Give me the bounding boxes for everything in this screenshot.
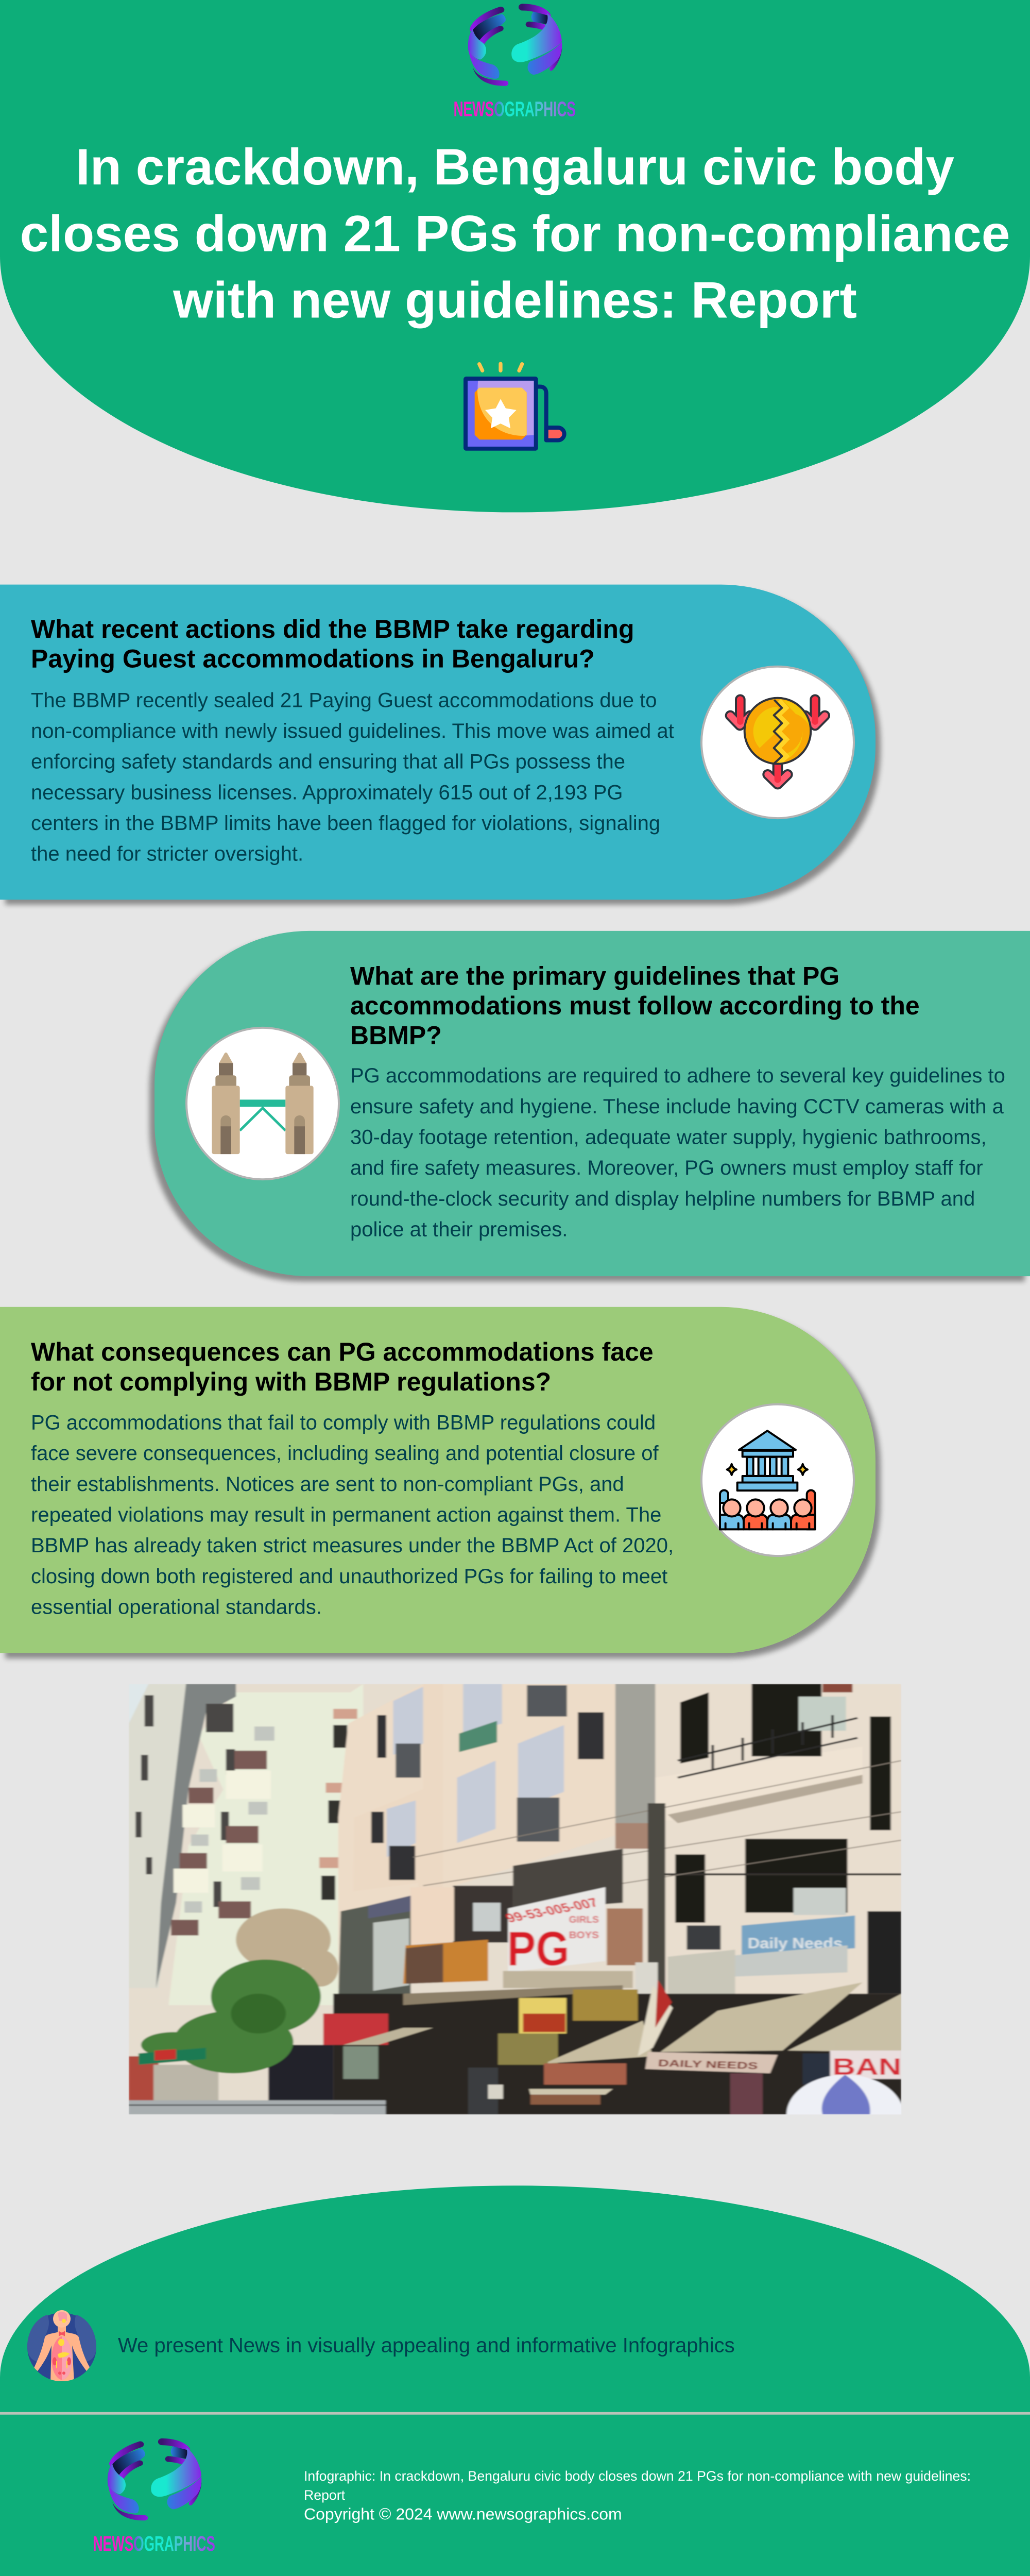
title [20, 138, 1010, 329]
text: consequences: essential operational standards. [31, 1596, 322, 1618]
heading: primary guidelines: What are the primary guidelines that PG [350, 962, 839, 990]
icon: courthouse with people [700, 1403, 855, 1557]
text: primary guidelines: round-the-clock security and display helpline numbers for BBMP and [350, 1188, 975, 1210]
text: recent actions: non-compliance with newly issued guidelines. This move was aimed at [31, 720, 674, 742]
heading: recent actions: What recent actions did the BBMP take regarding [31, 615, 634, 643]
text: primary guidelines: and fire safety measures. Moreover, PG owners must employ staff for [350, 1157, 983, 1179]
text: primary guidelines: PG accommodations are required to adhere to several key guidelines to [350, 1064, 1005, 1087]
heading: recent actions: Paying Guest accommodations in Bengaluru? [31, 645, 595, 673]
photo: street with PG sign: PG [507, 1922, 570, 1976]
logo: Newsographics footer [93, 2438, 215, 2555]
title: with new guidelines: Report [173, 272, 857, 329]
text: consequences [31, 1412, 674, 1618]
text: recent actions [31, 689, 674, 866]
panel: recent actions [0, 585, 876, 900]
text: primary guidelines: ensure safety and hygiene. These include having CCTV cameras with a [350, 1095, 1004, 1118]
panel: primary guidelines [154, 931, 1030, 1276]
text: primary guidelines: police at their premises. [350, 1218, 568, 1241]
heading: consequences: for not complying with BBMP regulations? [31, 1367, 551, 1396]
footer divider [0, 2412, 1030, 2415]
photo: street with PG sign: 99-53-005-007 [503, 1895, 601, 1925]
title: closes down 21 PGs for non-compliance [20, 205, 1010, 262]
heading: primary guidelines [350, 962, 920, 1050]
photo: street with PG sign: GIRLS [569, 1914, 599, 1925]
logo: Newsographics: NEWSOGRAPHICS [454, 97, 576, 121]
photo: street with PG sign: BOYS [569, 1929, 599, 1940]
panel: consequences [0, 1307, 876, 1653]
text: consequences: PG accommodations that fail to comply with BBMP regulations could [31, 1412, 656, 1434]
text: recent actions: the need for stricter oversight. [31, 843, 303, 866]
heading: consequences [31, 1337, 654, 1396]
footer credit text: Infographic: In crackdown, Bengaluru civic body closes down 21 PGs for non-compliance with new guidelines: [304, 2468, 971, 2484]
text: recent actions: centers in the BBMP limits have been flagged for violations, signaling [31, 812, 660, 835]
title: In crackdown, Bengaluru civic body [76, 138, 954, 196]
logo: Newsographics [454, 4, 576, 121]
icon: mug with star [464, 362, 566, 451]
photo: street with PG sign [129, 1684, 901, 2114]
logo: Newsographics footer: NEWSOGRAPHICS [93, 2532, 215, 2555]
icon: cracked coin with down arrows [700, 666, 855, 819]
text: consequences: repeated violations may result in permanent action against them. The [31, 1504, 661, 1526]
heading: recent actions [31, 615, 634, 673]
header panel [0, 0, 1030, 512]
icon: human anatomy [27, 2310, 96, 2381]
footer credit text: Report [304, 2487, 345, 2503]
text: consequences: closing down both registered and unauthorized PGs for failing to meet [31, 1565, 667, 1588]
text: primary guidelines [350, 1064, 1005, 1241]
photo: street with PG sign: Daily Needs [748, 1935, 843, 1952]
heading: primary guidelines: accommodations must follow according to the [350, 991, 920, 1020]
text: consequences: their establishments. Notices are sent to non-compliant PGs, and [31, 1473, 624, 1496]
footer credit text [304, 2468, 971, 2523]
tagline: We present News in visually appealing and informative Infographics [118, 2334, 735, 2357]
icon: twin towers with bridge [185, 1027, 340, 1180]
text: primary guidelines: 30-day footage retention, adequate water supply, hygienic bathrooms, [350, 1126, 987, 1149]
text: consequences: face severe consequences, including sealing and potential closure of [31, 1442, 659, 1465]
heading: consequences: What consequences can PG accommodations face [31, 1337, 654, 1366]
text: recent actions: The BBMP recently sealed 21 Paying Guest accommodations due to [31, 689, 657, 711]
footer credit text: Copyright © 2024 www.newsographics.com [304, 2505, 622, 2523]
text: recent actions: enforcing safety standards and ensuring that all PGs possess the [31, 751, 625, 773]
text: consequences: BBMP has already taken strict measures under the BBMP Act of 2020, [31, 1534, 674, 1557]
footer panel [0, 2185, 1030, 2576]
heading: primary guidelines: BBMP? [350, 1021, 442, 1050]
photo: street with PG sign: DAILY NEEDS [658, 2058, 758, 2071]
text: recent actions: necessary business licenses. Approximately 615 out of 2,193 PG [31, 782, 623, 804]
